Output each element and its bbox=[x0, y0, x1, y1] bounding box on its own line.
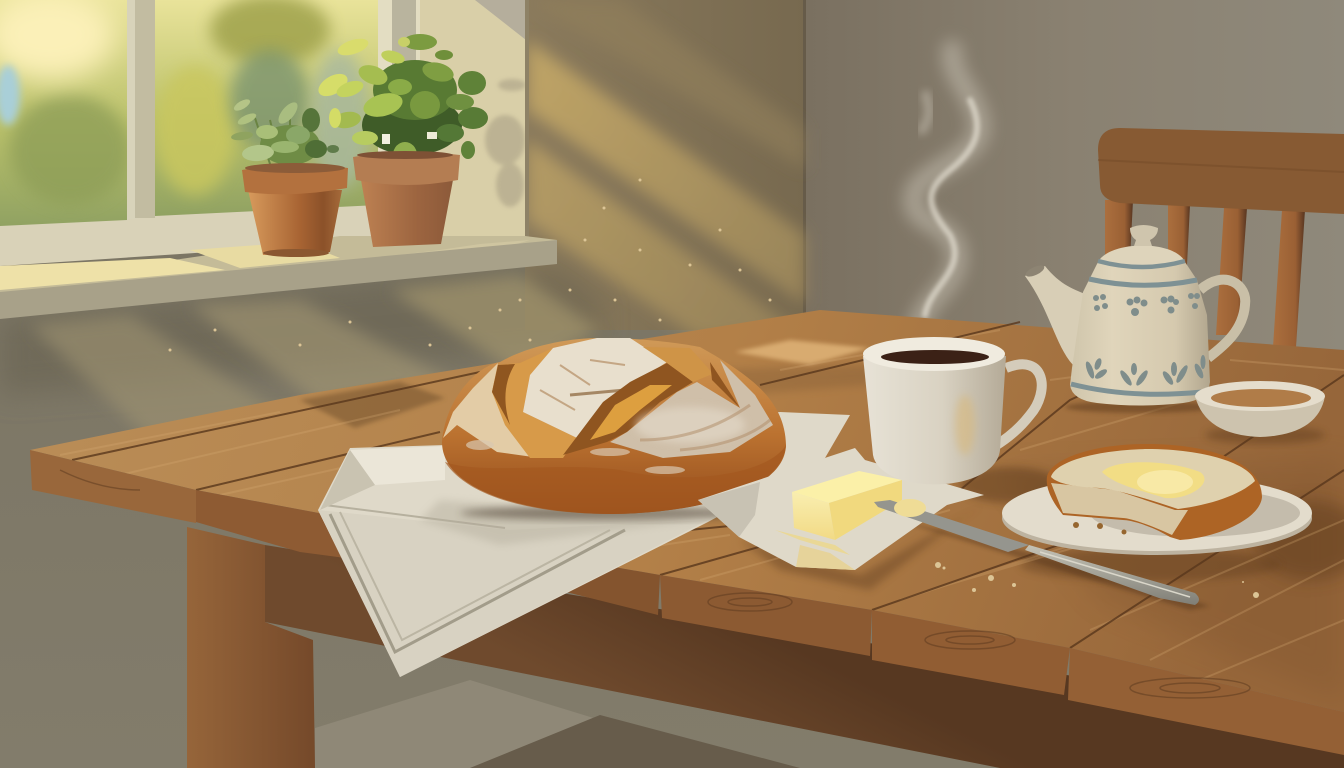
lid bbox=[1098, 246, 1185, 268]
toast top bbox=[1051, 449, 1255, 509]
steam bbox=[913, 50, 980, 335]
plate with toast bbox=[1002, 444, 1312, 555]
shadow bbox=[1065, 401, 1215, 413]
light rays bbox=[30, 0, 805, 440]
paw motifs bbox=[1084, 293, 1206, 387]
spout bbox=[1025, 266, 1088, 365]
wrapper paper bbox=[698, 448, 984, 570]
butter block bbox=[792, 471, 902, 540]
butter on wrapper bbox=[698, 448, 984, 570]
ear flap bbox=[643, 347, 740, 408]
wood grain bbox=[60, 330, 1344, 680]
left flour bbox=[443, 363, 540, 458]
toast crumb front bbox=[1051, 483, 1188, 535]
crumbs and dust bbox=[168, 178, 1259, 598]
small bowl bbox=[1195, 381, 1325, 444]
golden band bbox=[492, 348, 577, 458]
pot bbox=[242, 163, 348, 257]
chair bbox=[1098, 128, 1344, 347]
loaf shadow bbox=[460, 506, 760, 520]
plant left bbox=[231, 97, 348, 257]
teapot bbox=[1024, 225, 1245, 413]
window panes with foliage bbox=[0, 0, 380, 230]
butter on toast bbox=[1102, 462, 1205, 498]
plate crumbs bbox=[1073, 522, 1126, 534]
window sill bbox=[0, 236, 557, 319]
score slash bbox=[563, 363, 693, 455]
table bbox=[30, 310, 1344, 768]
crust bbox=[442, 338, 786, 514]
plank front faces bbox=[30, 450, 196, 523]
table leg and apron bbox=[187, 527, 315, 768]
top surface bbox=[30, 310, 1344, 712]
plant right bbox=[315, 34, 488, 247]
sunlit and shaded patches bbox=[300, 382, 445, 428]
foliage bbox=[231, 97, 339, 170]
bread loaf bbox=[442, 338, 786, 520]
plank seams bbox=[72, 322, 1344, 648]
window reveal bbox=[420, 0, 526, 238]
leaf motifs bbox=[1084, 361, 1096, 379]
main flour patch bbox=[523, 338, 667, 438]
handle bbox=[1200, 280, 1245, 358]
body bbox=[1070, 262, 1210, 406]
butter dollop bbox=[894, 499, 926, 517]
napkin bbox=[318, 412, 850, 677]
window bbox=[0, 0, 529, 266]
flour dust on lower crust bbox=[466, 440, 685, 474]
bands bbox=[1098, 261, 1185, 267]
coffee mug bbox=[863, 337, 1042, 484]
toast bbox=[1047, 444, 1262, 540]
window frame bbox=[0, 0, 420, 266]
right flour bbox=[610, 360, 773, 458]
butter knife bbox=[874, 499, 1199, 605]
